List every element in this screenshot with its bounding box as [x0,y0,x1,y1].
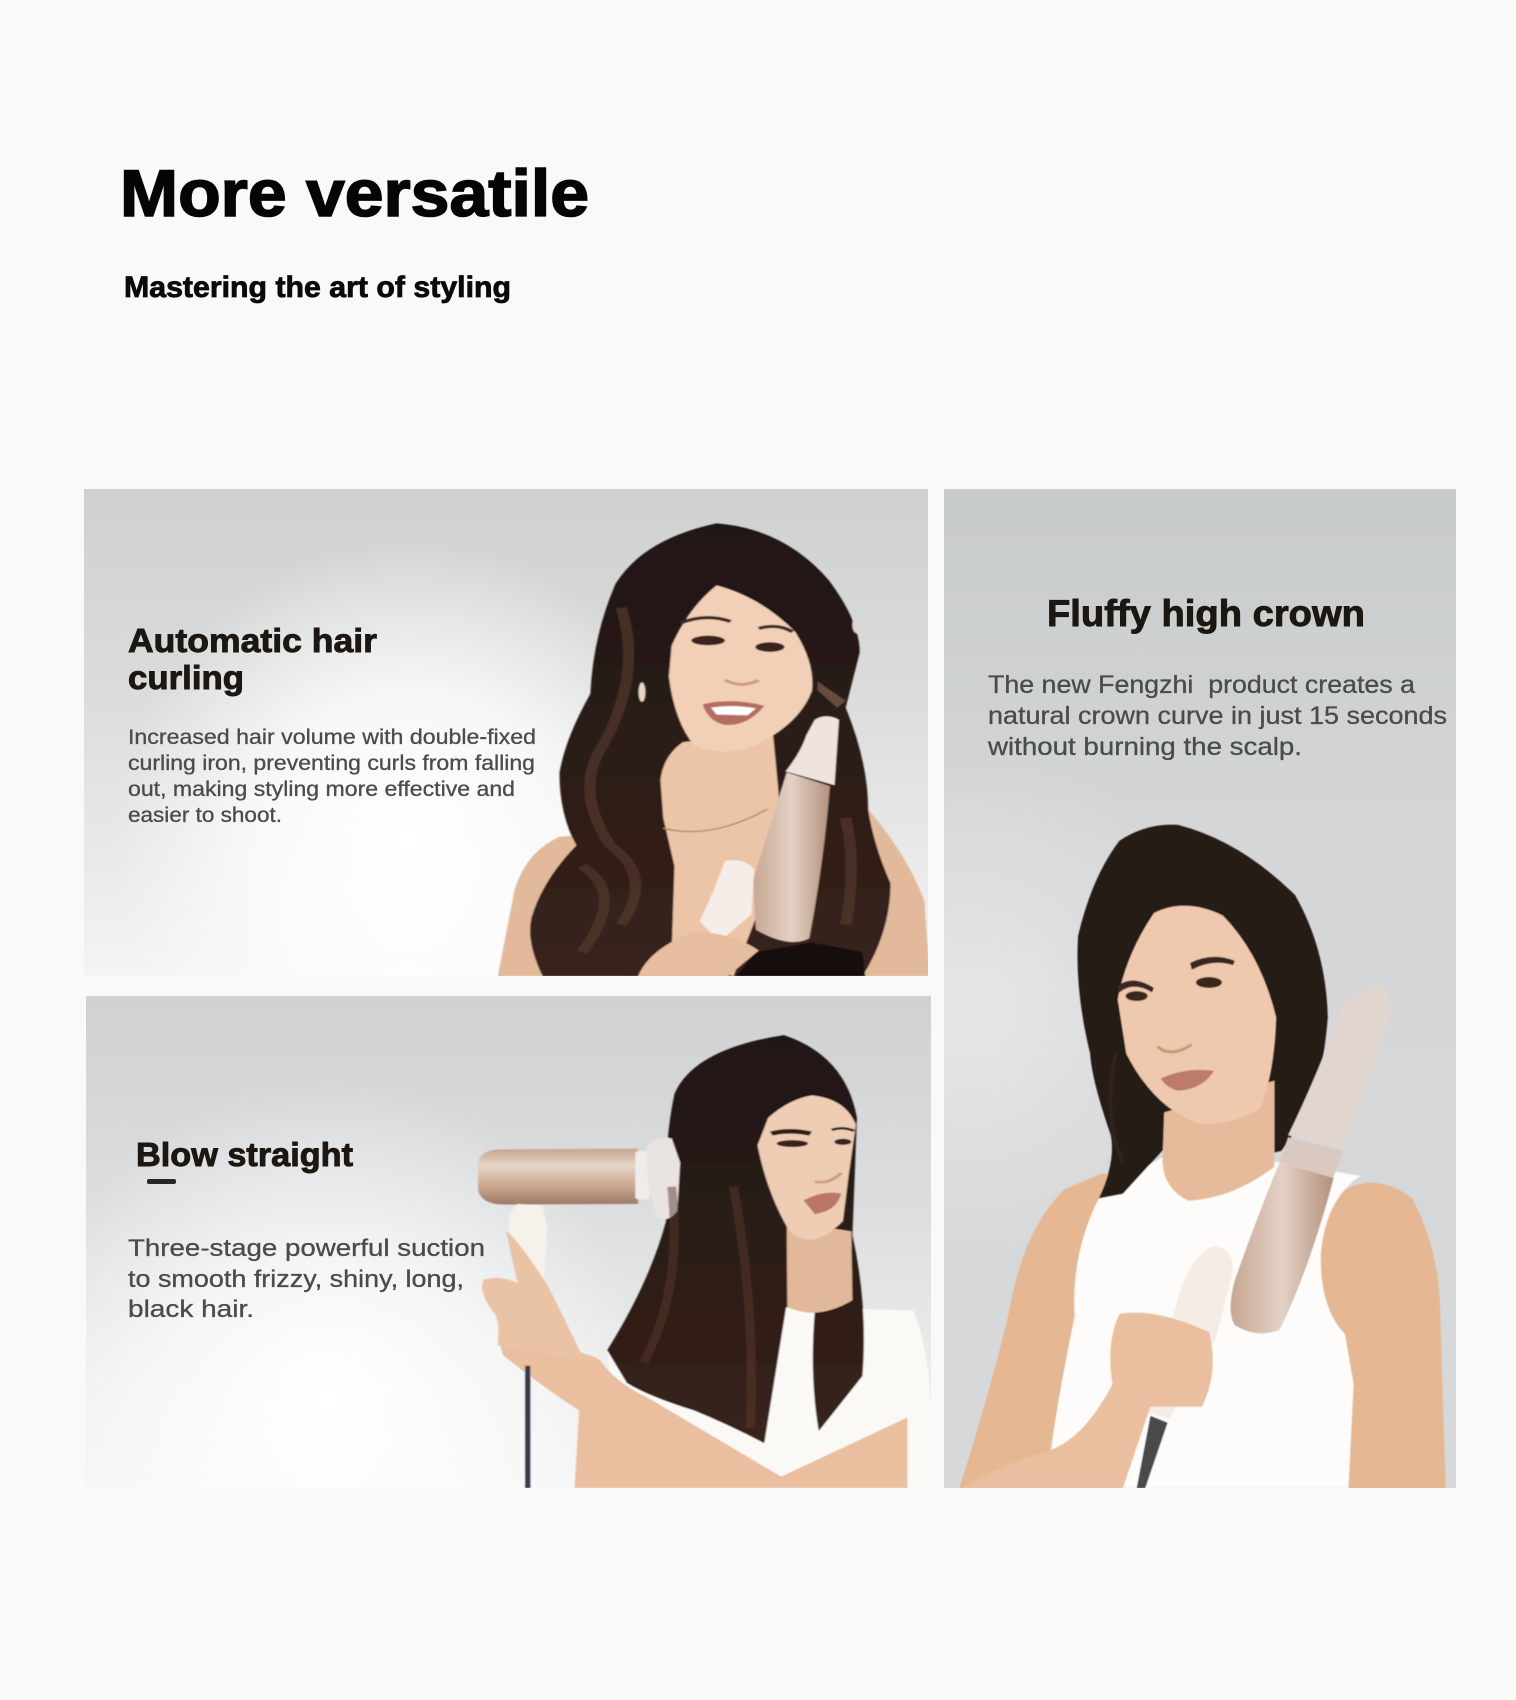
body text: curling iron, preventing curls from falling [128,752,535,775]
heading: Fluffy high crown [1047,593,1365,634]
heading: Blow straight [136,1136,353,1173]
body text [987,671,1447,761]
body text: without burning the scalp. [987,733,1302,761]
title: More versatile [120,156,589,230]
body text [128,1238,484,1318]
panel: fluffy high crown [944,489,1456,1488]
heading accent dash [147,1179,176,1184]
body text: to smooth frizzy, shiny, long, [128,1266,464,1293]
photo: woman with styling wand [959,825,1446,1488]
body text: easier to shoot. [128,804,282,827]
photo: woman with curling wand [498,523,930,976]
body text: Increased hair volume with double-fixed [128,726,536,749]
body text [128,726,536,827]
body text: The new Fengzhi product creates a [988,671,1415,699]
heading [128,622,377,696]
body text: out, making styling more effective and [128,778,515,801]
photo: woman with hair dryer [478,1035,932,1488]
body text: Three-stage powerful suction [128,1235,485,1262]
heading: curling [128,659,244,696]
subtitle: Mastering the art of styling [124,271,511,304]
heading: Automatic hair [128,622,377,659]
panel: automatic hair curling [84,489,930,976]
body text: black hair. [128,1296,254,1323]
panel: blow straight [86,996,932,1488]
body text: natural crown curve in just 15 seconds [988,702,1447,730]
